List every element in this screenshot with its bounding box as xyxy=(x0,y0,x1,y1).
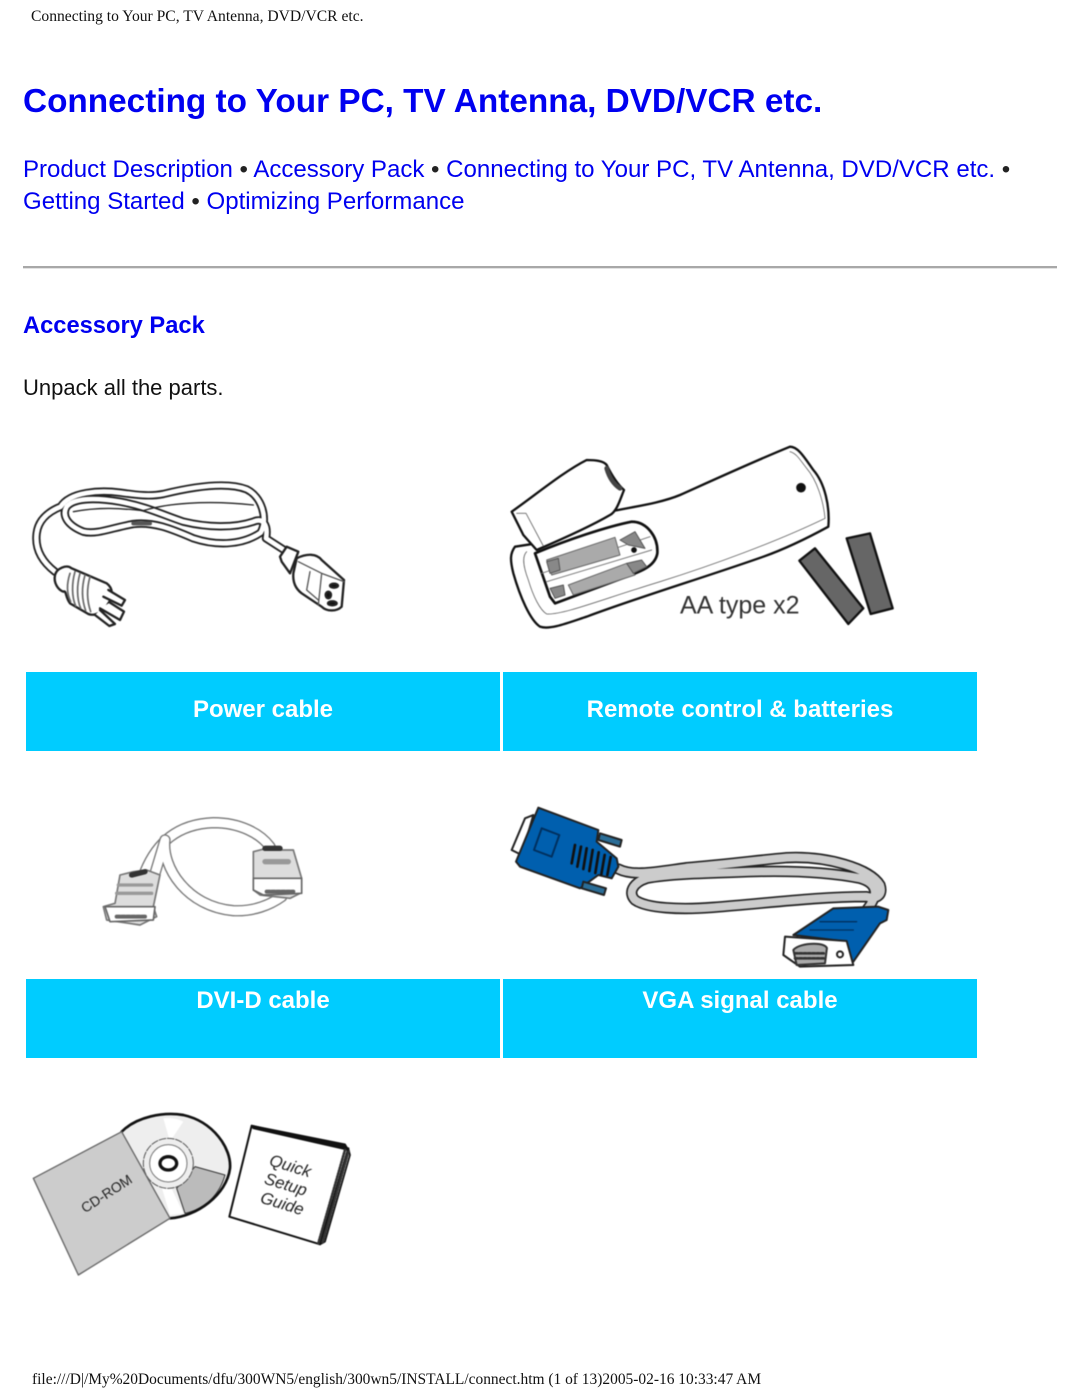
icon: power cable xyxy=(31,480,346,628)
plug xyxy=(55,567,112,615)
navigation links: Product Description • Accessory Pack • Connecting to Your PC, TV Antenna, DVD/VCR etc. • xyxy=(23,156,1010,183)
left connector xyxy=(512,815,533,855)
remote body xyxy=(511,447,829,628)
icon: CD-ROM and quick setup guide xyxy=(32,1112,352,1276)
panel: VGA signal cable label xyxy=(503,979,977,1058)
panel: remote control label xyxy=(503,672,977,751)
cable xyxy=(618,857,881,910)
title: Connecting to Your PC, TV Antenna, DVD/VCR etc. xyxy=(23,83,822,120)
battery label: AA type x2 xyxy=(680,591,800,619)
cable outline xyxy=(36,485,287,572)
sleeve xyxy=(33,1132,170,1275)
page header text: Connecting to Your PC, TV Antenna, DVD/VCR etc. xyxy=(31,8,364,25)
navigation links xyxy=(23,156,1010,215)
right connector xyxy=(253,848,302,898)
right connector xyxy=(793,907,888,963)
icon: DVI-D cable xyxy=(102,816,304,926)
panel: power cable label xyxy=(26,672,500,751)
panel: power cable label: Power cable xyxy=(193,696,333,723)
disc xyxy=(122,1114,230,1218)
icon: CD-ROM and quick setup guide: Setup xyxy=(262,1169,309,1200)
page footer text: file:///D|/My%20Documents/dfu/300WN5/english/300wn5/INSTALL/connect.htm (1 of 13)2005-02-16 10:33:47 AM xyxy=(32,1371,761,1388)
intro text: Unpack all the parts. xyxy=(23,375,224,400)
navigation links: Getting Started • Optimizing Performance xyxy=(23,188,464,215)
icon: CD-ROM and quick setup guide: Quick xyxy=(267,1151,315,1182)
panel: VGA signal cable label: VGA signal cable xyxy=(642,987,838,1014)
cover xyxy=(512,460,624,550)
left connector xyxy=(103,870,160,925)
icon: CD-ROM and quick setup guide: CD-ROM xyxy=(78,1171,135,1216)
panel: DVI-D cable label: DVI-D cable xyxy=(196,987,330,1014)
panel: DVI-D cable label xyxy=(26,979,500,1058)
section heading: Accessory Pack xyxy=(23,313,205,339)
horizontal divider xyxy=(23,266,1057,269)
panel: remote control label: Remote control & batteries xyxy=(587,696,893,723)
icon: VGA signal cable xyxy=(510,806,890,968)
connector xyxy=(280,547,298,573)
booklet xyxy=(229,1126,348,1244)
icon: remote control and batteries xyxy=(509,444,895,630)
battery compartment xyxy=(535,522,657,603)
icon: CD-ROM and quick setup guide: Guide xyxy=(258,1188,306,1219)
batteries xyxy=(799,548,863,624)
